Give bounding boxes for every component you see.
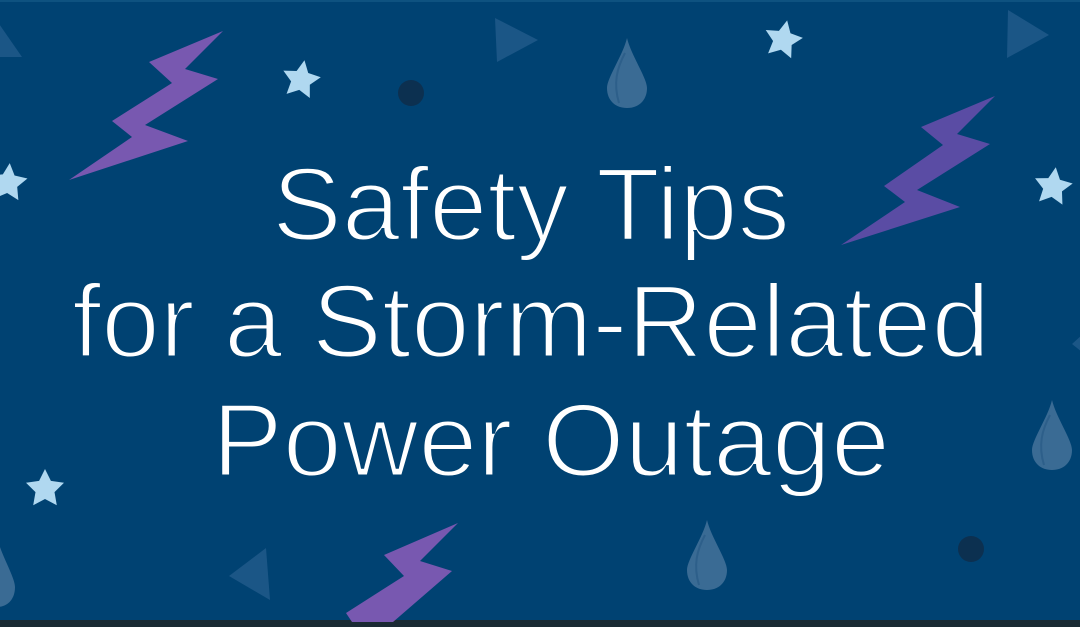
- lightning bolt right: [841, 96, 995, 245]
- stars: [0, 16, 1075, 505]
- title: Power Outage: [212, 383, 890, 499]
- title: Safety Tips: [272, 147, 790, 263]
- lightning bolt top-left: [69, 31, 223, 180]
- title: [72, 147, 990, 499]
- lightning bolt bottom: [346, 523, 458, 622]
- title: for a Storm-Related: [72, 264, 990, 380]
- decorative dark circles: [398, 80, 984, 562]
